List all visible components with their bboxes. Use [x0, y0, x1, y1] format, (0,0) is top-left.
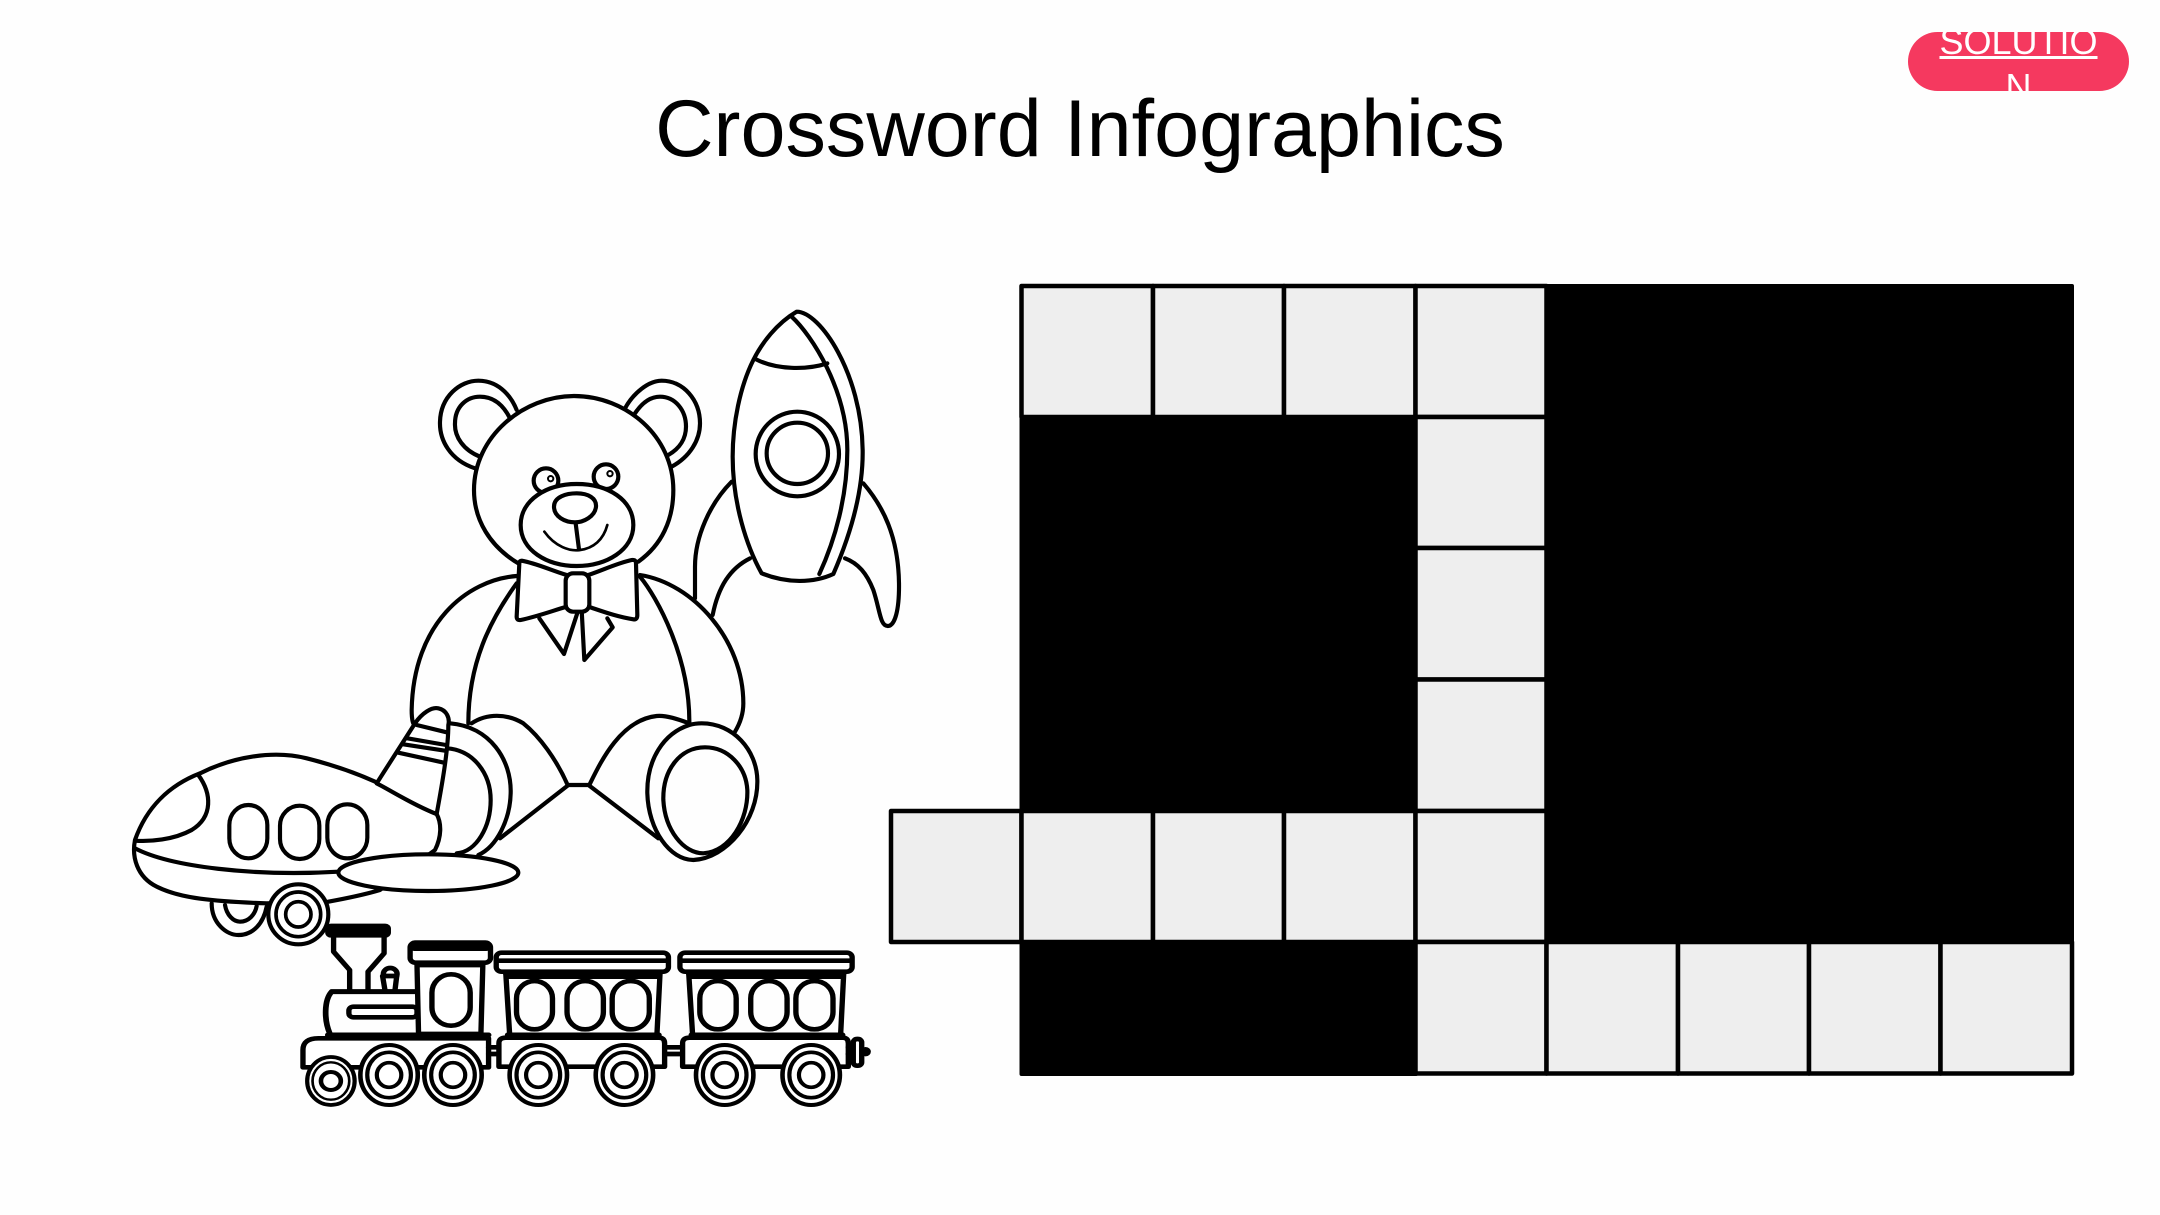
- title: Crossword Infographics: [655, 84, 1505, 174]
- icon: rocket: [695, 312, 899, 626]
- icon: teddy bear: [412, 381, 757, 860]
- icon: toy train: [303, 926, 868, 1105]
- crossword grid: [891, 286, 2072, 1074]
- icon: airplane: [134, 708, 518, 944]
